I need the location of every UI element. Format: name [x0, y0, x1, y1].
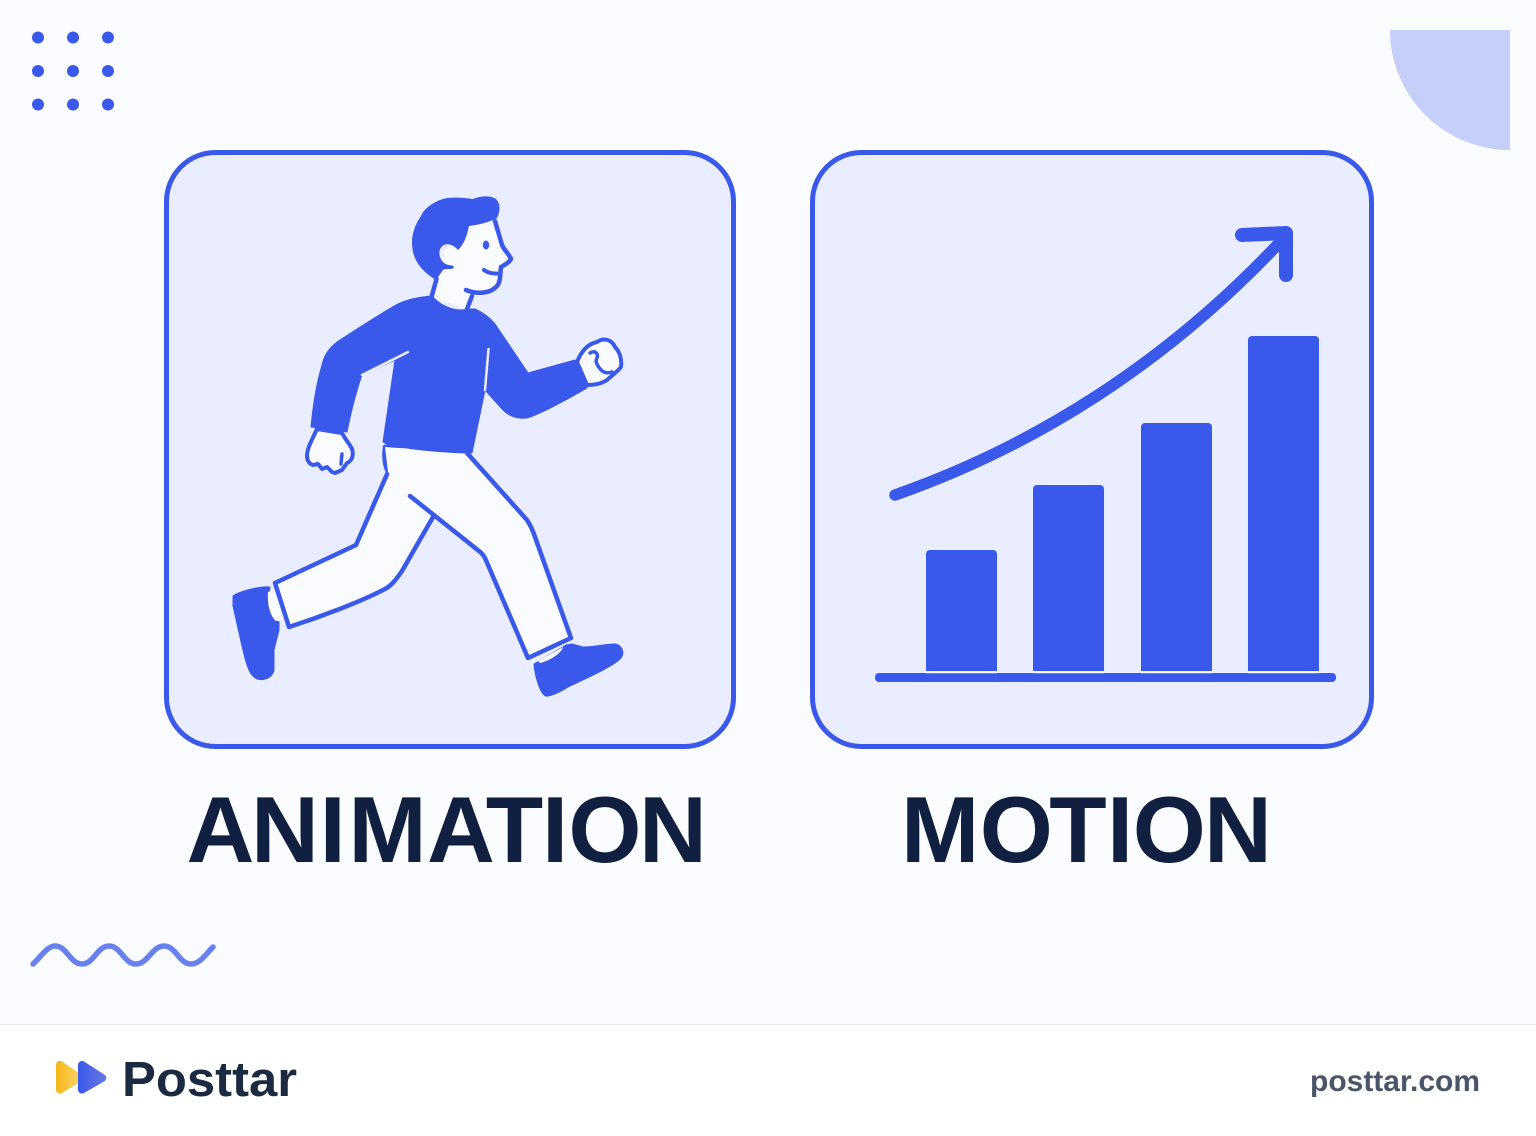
heading: animation: ANIMATION [186, 777, 707, 882]
neck and face [431, 222, 511, 309]
decoration: dot grid [32, 32, 114, 110]
chart: bar base highlights [926, 672, 1319, 674]
logo wordmark: Posttar [122, 1053, 297, 1107]
front shoe [534, 644, 623, 696]
sleeve gap [362, 352, 408, 375]
sweater [311, 296, 587, 453]
back shoe [233, 587, 279, 680]
chart: bars [926, 336, 1319, 671]
chart: baseline [875, 673, 1336, 682]
icon: running person [233, 196, 623, 696]
panel: motion [812, 152, 1372, 746]
arrow: growth curve [895, 233, 1286, 495]
decoration: wave [33, 946, 213, 964]
decoration: quarter circle [1390, 30, 1510, 150]
back leg [275, 445, 470, 627]
logo icon [56, 1061, 106, 1094]
website url: posttar.com [1310, 1065, 1480, 1098]
right hand [577, 340, 621, 385]
heading: motion: MOTION [901, 777, 1272, 882]
left hand [307, 429, 353, 473]
hair [412, 196, 500, 280]
footer [0, 1024, 1536, 1136]
mouth [484, 270, 500, 274]
panel: animation [166, 152, 734, 746]
front leg [385, 447, 571, 658]
back sock [268, 590, 284, 621]
eye [483, 240, 489, 250]
front sock [538, 647, 563, 663]
